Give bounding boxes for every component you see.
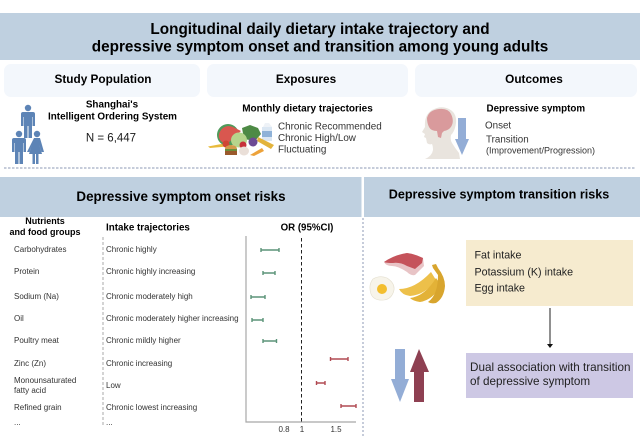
panel: transition risks [370, 240, 633, 402]
title banner [0, 13, 640, 60]
heading: outcomes [415, 64, 637, 97]
heading: transition risks: Depressive symptom transition risks [389, 188, 609, 202]
icon: red up arrow [410, 349, 429, 402]
column: intake trajectories: ... [106, 418, 113, 427]
box: food factors: Potassium (K) intake [474, 266, 573, 278]
risk intervals [316, 357, 356, 408]
column: nutrients and food groups: Protein [14, 267, 39, 276]
heading: onset risks [0, 177, 362, 217]
text: data source [48, 100, 177, 122]
icon: assorted food [208, 123, 274, 156]
text: transition: Transition [486, 134, 529, 146]
section divider [4, 167, 636, 169]
icon: fried egg [370, 277, 394, 300]
axis labels: 1 [300, 425, 305, 434]
column: nutrients and food groups: Zinc (Zn) [14, 359, 46, 368]
text: trajectory types: Fluctuating [278, 144, 326, 156]
column: intake trajectories: Chronic moderately higher increasing [106, 314, 239, 323]
column: nutrients and food groups: and food groups [10, 227, 80, 237]
arrow: factors to association [547, 308, 553, 348]
text: transition: (Improvement/Progression) [486, 146, 595, 156]
box: dual association: of depressive symptom [470, 375, 590, 388]
text: sample size: N = 6,447 [86, 132, 136, 144]
text: trajectory types: Chronic High/Low [278, 133, 357, 144]
column: intake trajectories: Chronic lowest increasing [106, 403, 197, 412]
box: food factors [466, 240, 633, 306]
text: data source: Intelligent Ordering System [48, 112, 177, 122]
column: nutrients and food groups: Refined grain [14, 403, 62, 412]
text: trajectory types [278, 122, 382, 156]
panel: outcomes [415, 64, 637, 159]
column: nutrients and food groups: fatty acid [14, 386, 46, 395]
icon: people [12, 105, 44, 164]
panel: onset risk table [10, 216, 356, 434]
panel: study population [4, 64, 200, 164]
column: nutrients and food groups: Poultry meat [14, 336, 60, 345]
column: intake trajectories: Chronic moderately high [106, 292, 193, 301]
box: food factors: Egg intake [474, 282, 525, 294]
column: intake trajectories: Chronic highly [106, 245, 157, 254]
heading: OR (95%CI): OR (95%CI) [281, 222, 333, 234]
column: intake trajectories: Intake trajectories [106, 222, 190, 234]
heading: exposures: Exposures [276, 72, 337, 86]
heading: transition risks [364, 177, 640, 217]
title banner: depressive symptom onset and transition among young adults [92, 38, 548, 56]
icon: bananas [399, 264, 445, 303]
box: dual association [466, 353, 633, 398]
text: monthly dietary trajectories: Monthly dietary trajectories [242, 104, 373, 114]
column: intake trajectories: Low [106, 381, 121, 390]
column: intake trajectories: Chronic mildly higher [106, 336, 181, 345]
text: data source: Shanghai's [86, 100, 139, 110]
icon: blue down arrow [455, 118, 469, 155]
heading: onset risks: Depressive symptom onset risks [76, 189, 286, 204]
icon: head with brain [422, 107, 460, 159]
column: intake trajectories: Chronic highly increasing [106, 267, 195, 276]
text: onset: Onset [485, 120, 511, 132]
axis labels [278, 425, 342, 434]
title banner: Longitudinal daily dietary intake trajectory and [150, 21, 490, 38]
column: nutrients and food groups: Sodium (Na) [14, 292, 59, 301]
icon: meat [384, 253, 424, 275]
column: intake trajectories: Chronic increasing [106, 359, 172, 368]
text: trajectory types: Chronic Recommended [278, 122, 382, 132]
column: nutrients and food groups: Oil [14, 314, 24, 323]
panel: exposures [207, 64, 408, 156]
heading: outcomes: Outcomes [505, 72, 563, 86]
column: nutrients and food groups [10, 216, 80, 427]
column: nutrients and food groups: Nutrients [25, 216, 65, 226]
column: intake trajectories [106, 222, 239, 427]
column: nutrients and food groups: ... [14, 418, 21, 427]
forest plot [246, 222, 356, 434]
axis labels: 0.8 [278, 425, 290, 434]
heading: study population: Study Population [54, 72, 152, 86]
text: depressive symptom: Depressive symptom [486, 104, 585, 114]
axis labels: 1.5 [330, 425, 342, 434]
box: dual association: Dual association with transition [470, 361, 630, 374]
text: transition [486, 134, 595, 156]
box: food factors: Fat intake [474, 250, 521, 262]
heading: study population [4, 64, 200, 97]
column: nutrients and food groups: Carbohydrates [14, 245, 66, 254]
column: nutrients and food groups: Monounsaturated [14, 376, 76, 385]
heading: exposures [207, 64, 408, 97]
protective intervals [251, 248, 279, 343]
icon: blue down arrow [391, 349, 409, 402]
